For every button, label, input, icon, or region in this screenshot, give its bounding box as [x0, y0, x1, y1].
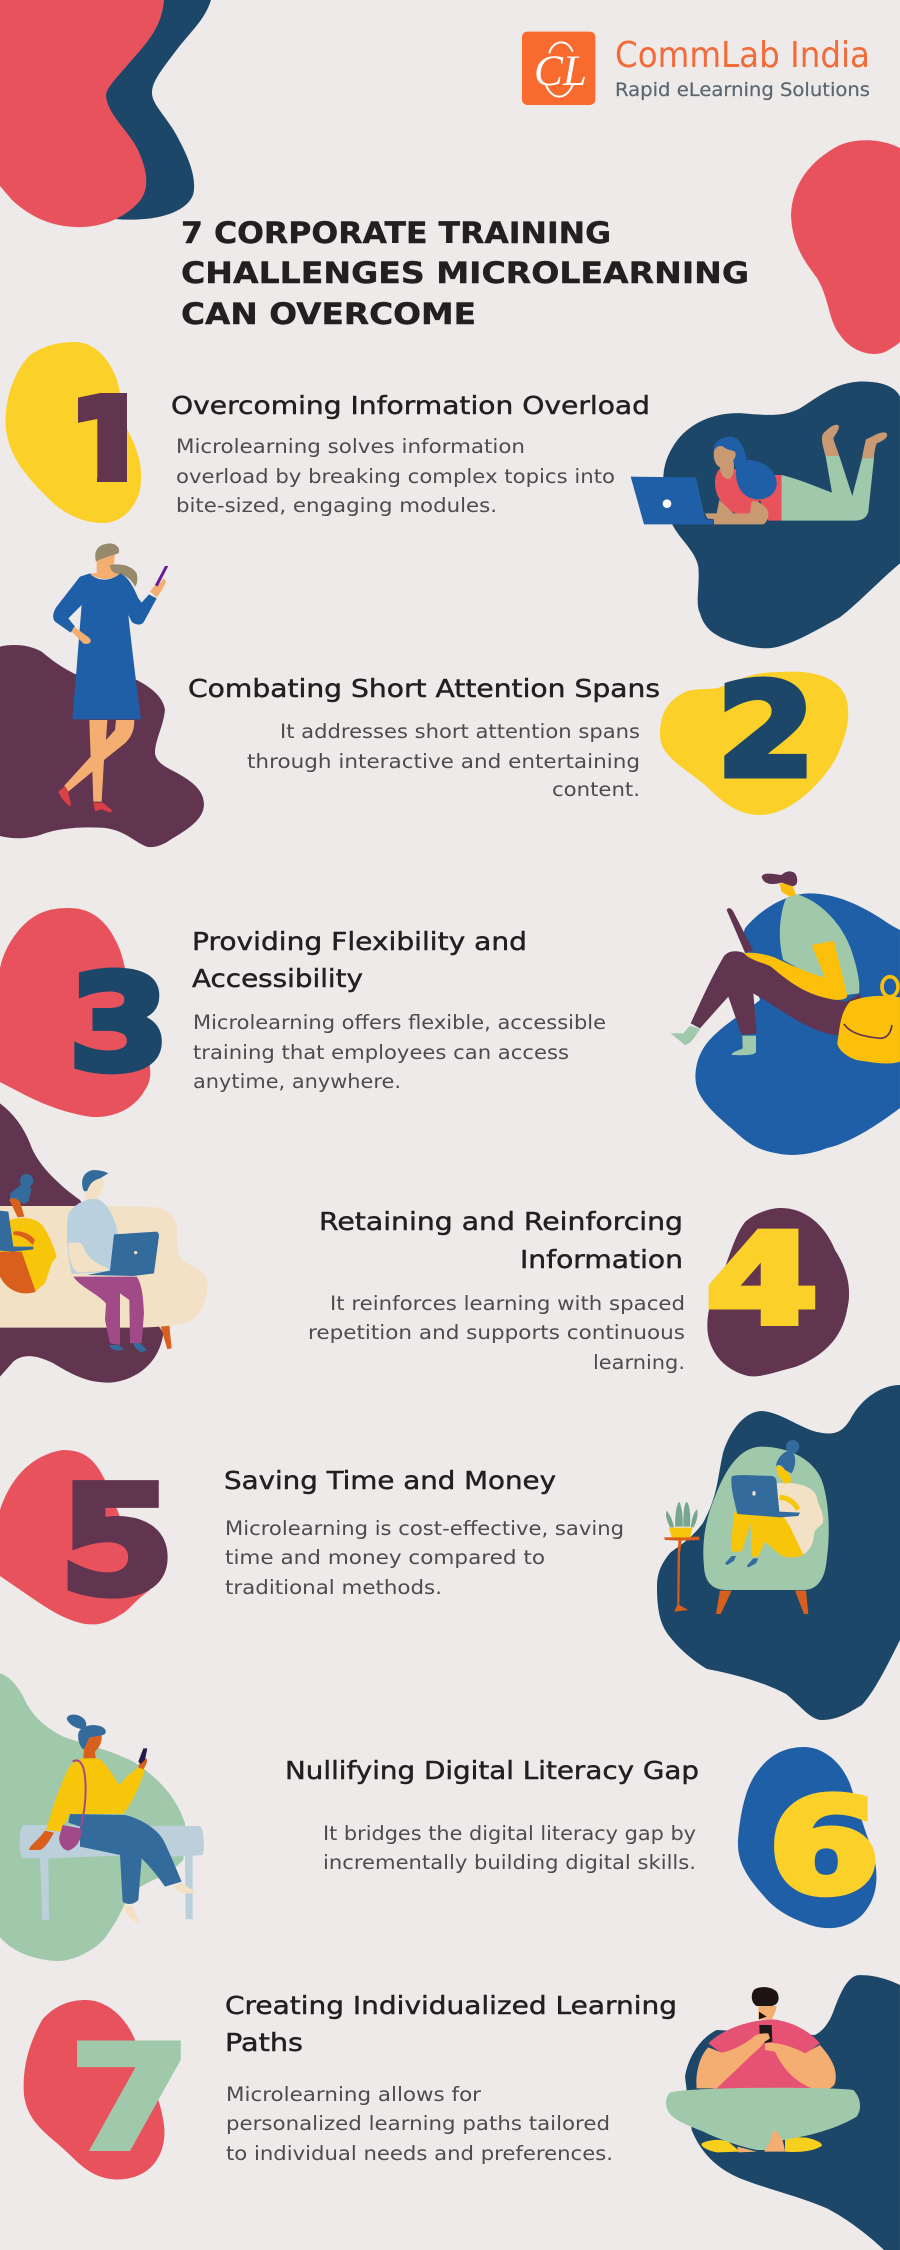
heading 7: Paths [225, 2028, 303, 2057]
illustration: people on sofa [0, 1103, 207, 1383]
body 2 [247, 720, 640, 801]
heading 1: Overcoming Information Overload [171, 391, 650, 420]
panel: challenge 4 [0, 1103, 849, 1383]
number blob 5 [0, 1450, 150, 1624]
body 3: anytime, anywhere. [193, 1070, 401, 1093]
illustration: woman lying with laptop [631, 382, 900, 648]
number blob 7 [24, 2000, 164, 2179]
body 5: Microlearning is cost-effective, saving [225, 1517, 624, 1540]
body 4: repetition and supports continuous [308, 1321, 685, 1344]
body 3: training that employees can access [193, 1041, 569, 1064]
illustration: man sitting cross-legged with phone [666, 1975, 900, 2250]
heading 6: Nullifying Digital Literacy Gap [285, 1756, 699, 1785]
heading 3: Providing Flexibility and [192, 927, 527, 956]
heading 5: Saving Time and Money [224, 1466, 556, 1495]
panel: challenge 7 [24, 1975, 900, 2250]
heading 3 [192, 927, 527, 993]
body 7: personalized learning paths tailored [226, 2112, 610, 2135]
title: 7 CORPORATE TRAINING [181, 216, 611, 250]
heading 4 [319, 1207, 683, 1274]
logo wordmark: CommLab India [615, 35, 870, 76]
number 7: 7 [70, 2017, 190, 2182]
body 3: Microlearning offers flexible, accessible [193, 1011, 606, 1034]
number 2: 2 [717, 656, 815, 805]
number 5: 5 [59, 1454, 175, 1629]
title: CAN OVERCOME [181, 297, 476, 331]
body 7: to individual needs and preferences. [226, 2142, 613, 2165]
body 5: traditional methods. [225, 1576, 442, 1599]
illustration: woman with phone on blob [0, 543, 204, 847]
body 4 [308, 1292, 685, 1374]
body 7: Microlearning allows for [226, 2083, 482, 2106]
illustration: woman on bench with phone [0, 1673, 204, 1961]
panel: challenge 5 [0, 1385, 900, 1720]
number blob 4 [707, 1208, 849, 1376]
logo mark [522, 32, 595, 105]
panel: challenge 1 [6, 342, 900, 648]
body 6: incrementally building digital skills. [323, 1851, 696, 1874]
body 1: overload by breaking complex topics into [176, 465, 615, 488]
number blob 3 [0, 908, 150, 1117]
decorative blob: top right [791, 140, 900, 354]
number 6: 6 [768, 1771, 880, 1923]
panel: challenge 6 [0, 1673, 880, 1961]
number blob 1 [6, 342, 141, 523]
decorative blobs: top left [0, 0, 211, 227]
number 1: 1 [61, 369, 159, 534]
title: CHALLENGES MICROLEARNING [181, 256, 749, 290]
body 2: through interactive and entertaining [247, 750, 640, 773]
body 6: It bridges the digital literacy gap by [323, 1822, 696, 1845]
body 6 [323, 1822, 696, 1874]
body 1: Microlearning solves information [176, 435, 525, 458]
heading 7 [225, 1991, 677, 2057]
body 2: content. [552, 778, 640, 801]
number blob 2 [660, 672, 848, 815]
body 5 [225, 1517, 624, 1599]
body 1: bite-sized, engaging modules. [176, 494, 497, 517]
number 3: 3 [68, 946, 170, 1100]
body 4: It reinforces learning with spaced [330, 1292, 685, 1315]
logo: CommLab India [522, 32, 870, 105]
number 4: 4 [706, 1208, 818, 1352]
heading 3: Accessibility [192, 964, 363, 993]
number blob 6 [738, 1747, 876, 1928]
title [181, 216, 749, 331]
illustration: man with laptop and backpack [671, 871, 900, 1155]
illustration: woman in armchair with plant [664, 1440, 829, 1614]
panel: challenge 3 [0, 871, 900, 1155]
heading 4: Information [520, 1245, 683, 1274]
logo tagline: Rapid eLearning Solutions [615, 79, 870, 101]
illustration blob 5 [657, 1385, 900, 1720]
heading 2: Combating Short Attention Spans [188, 674, 660, 703]
body 2: It addresses short attention spans [280, 720, 640, 743]
heading 4: Retaining and Reinforcing [319, 1207, 683, 1236]
logo mark: CL [534, 47, 587, 95]
body 4: learning. [593, 1351, 685, 1374]
body 3 [193, 1011, 606, 1093]
panel: challenge 2 [0, 543, 848, 847]
body 7 [226, 2083, 613, 2165]
heading 7: Creating Individualized Learning [225, 1991, 677, 2020]
body 1 [176, 435, 615, 517]
body 5: time and money compared to [225, 1546, 545, 1569]
